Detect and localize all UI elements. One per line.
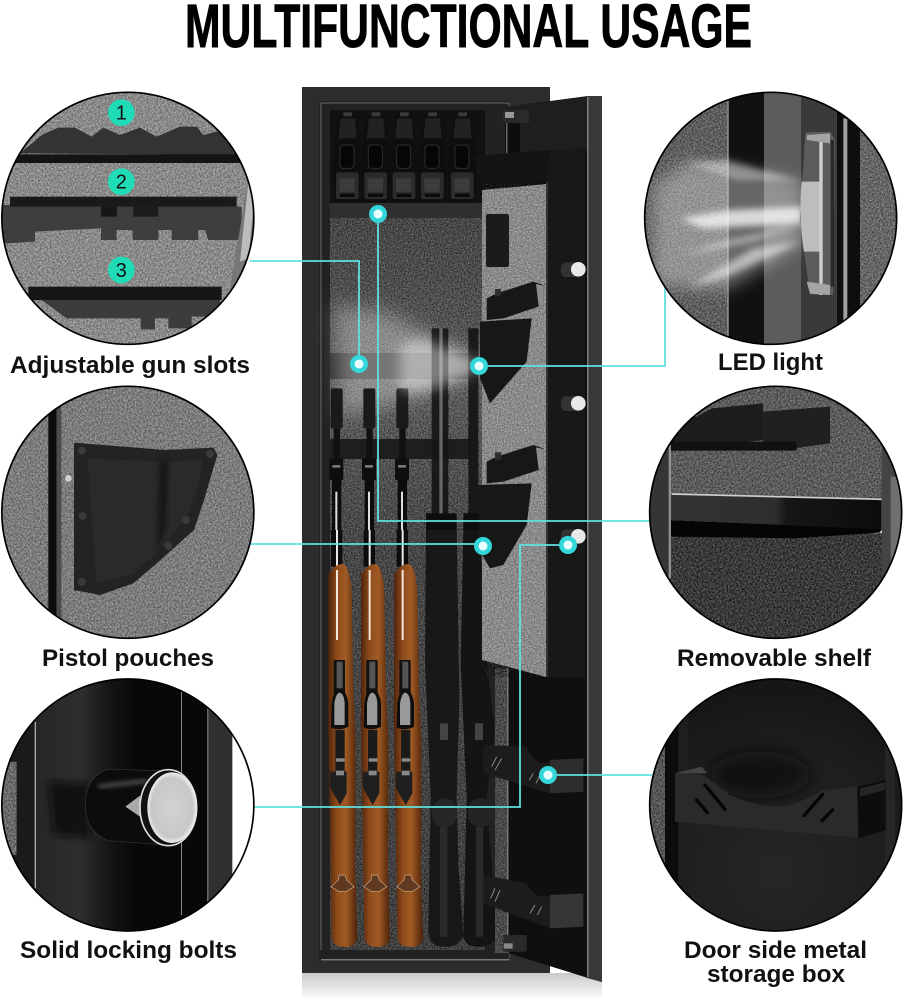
- foam row 2: [0, 205, 242, 243]
- foam row 3: [42, 298, 220, 329]
- bolt body: [85, 769, 167, 845]
- foam blocks: [670, 403, 763, 445]
- foam row 1: [20, 127, 237, 155]
- lower shelf: [330, 439, 470, 459]
- badge 2: 2: [116, 172, 127, 194]
- storage box: [473, 148, 585, 678]
- label: adjustable gun slots: Adjustable gun slots: [10, 352, 250, 379]
- shelf front: [670, 494, 882, 530]
- pouch: [74, 443, 217, 595]
- panel: floor reflection: [302, 973, 602, 1000]
- panel: LED light: [640, 90, 900, 347]
- locking bolts: [561, 262, 586, 544]
- middle shelf: [330, 353, 475, 379]
- callout markers: [350, 205, 577, 784]
- panel: gun safe: [302, 87, 602, 982]
- badge 3: 3: [116, 260, 127, 282]
- rifles: [328, 388, 423, 947]
- light beams: [653, 162, 802, 288]
- open door: [505, 96, 602, 982]
- badge 3: [108, 257, 135, 283]
- label: door side metal storage box: [684, 937, 867, 988]
- pistols and pouches: [478, 282, 543, 568]
- light beam: [335, 305, 478, 415]
- panel: door side metal storage box: [647, 677, 904, 937]
- bottom hinge: [503, 935, 527, 952]
- right side strip: [230, 185, 253, 289]
- bottom frame: [319, 950, 509, 961]
- badge 2: [108, 168, 135, 195]
- label: LED light: LED light: [718, 349, 823, 376]
- panel: pistol pouches: [0, 385, 257, 640]
- door edge: [587, 96, 602, 982]
- panel: adjustable gun slots: [0, 92, 257, 345]
- badge 1: 1: [116, 103, 127, 125]
- panel: removable shelf: [647, 385, 904, 643]
- callout lines: [250, 214, 665, 807]
- door top hinge: [503, 110, 529, 158]
- right frame: [882, 447, 901, 578]
- lens: [800, 132, 835, 295]
- felt channel: [495, 668, 507, 953]
- felt back wall: [330, 218, 485, 951]
- safe body: [302, 87, 550, 973]
- bracket: [675, 773, 858, 838]
- label: door side metal storage box: storage box: [707, 961, 846, 988]
- label: removable shelf: Removable shelf: [677, 645, 872, 672]
- bracket slots: [697, 785, 833, 821]
- door top inner: [505, 97, 587, 157]
- light beam over guns: [400, 338, 478, 392]
- label: door side metal storage box: Door side metal: [684, 937, 867, 964]
- top shelf: [330, 203, 482, 218]
- label: solid locking bolts: Solid locking bolts: [20, 937, 237, 964]
- label: pistol pouches: Pistol pouches: [42, 645, 214, 672]
- panel: solid locking bolts: [0, 675, 257, 935]
- small pocket: [486, 214, 509, 267]
- door brackets: [483, 745, 583, 928]
- handguns rack: [333, 112, 477, 202]
- bolt head: [140, 770, 197, 846]
- shotguns: [425, 328, 497, 947]
- badge 1: [108, 99, 135, 126]
- bolt shadow: [48, 782, 90, 838]
- left frame: [650, 448, 669, 577]
